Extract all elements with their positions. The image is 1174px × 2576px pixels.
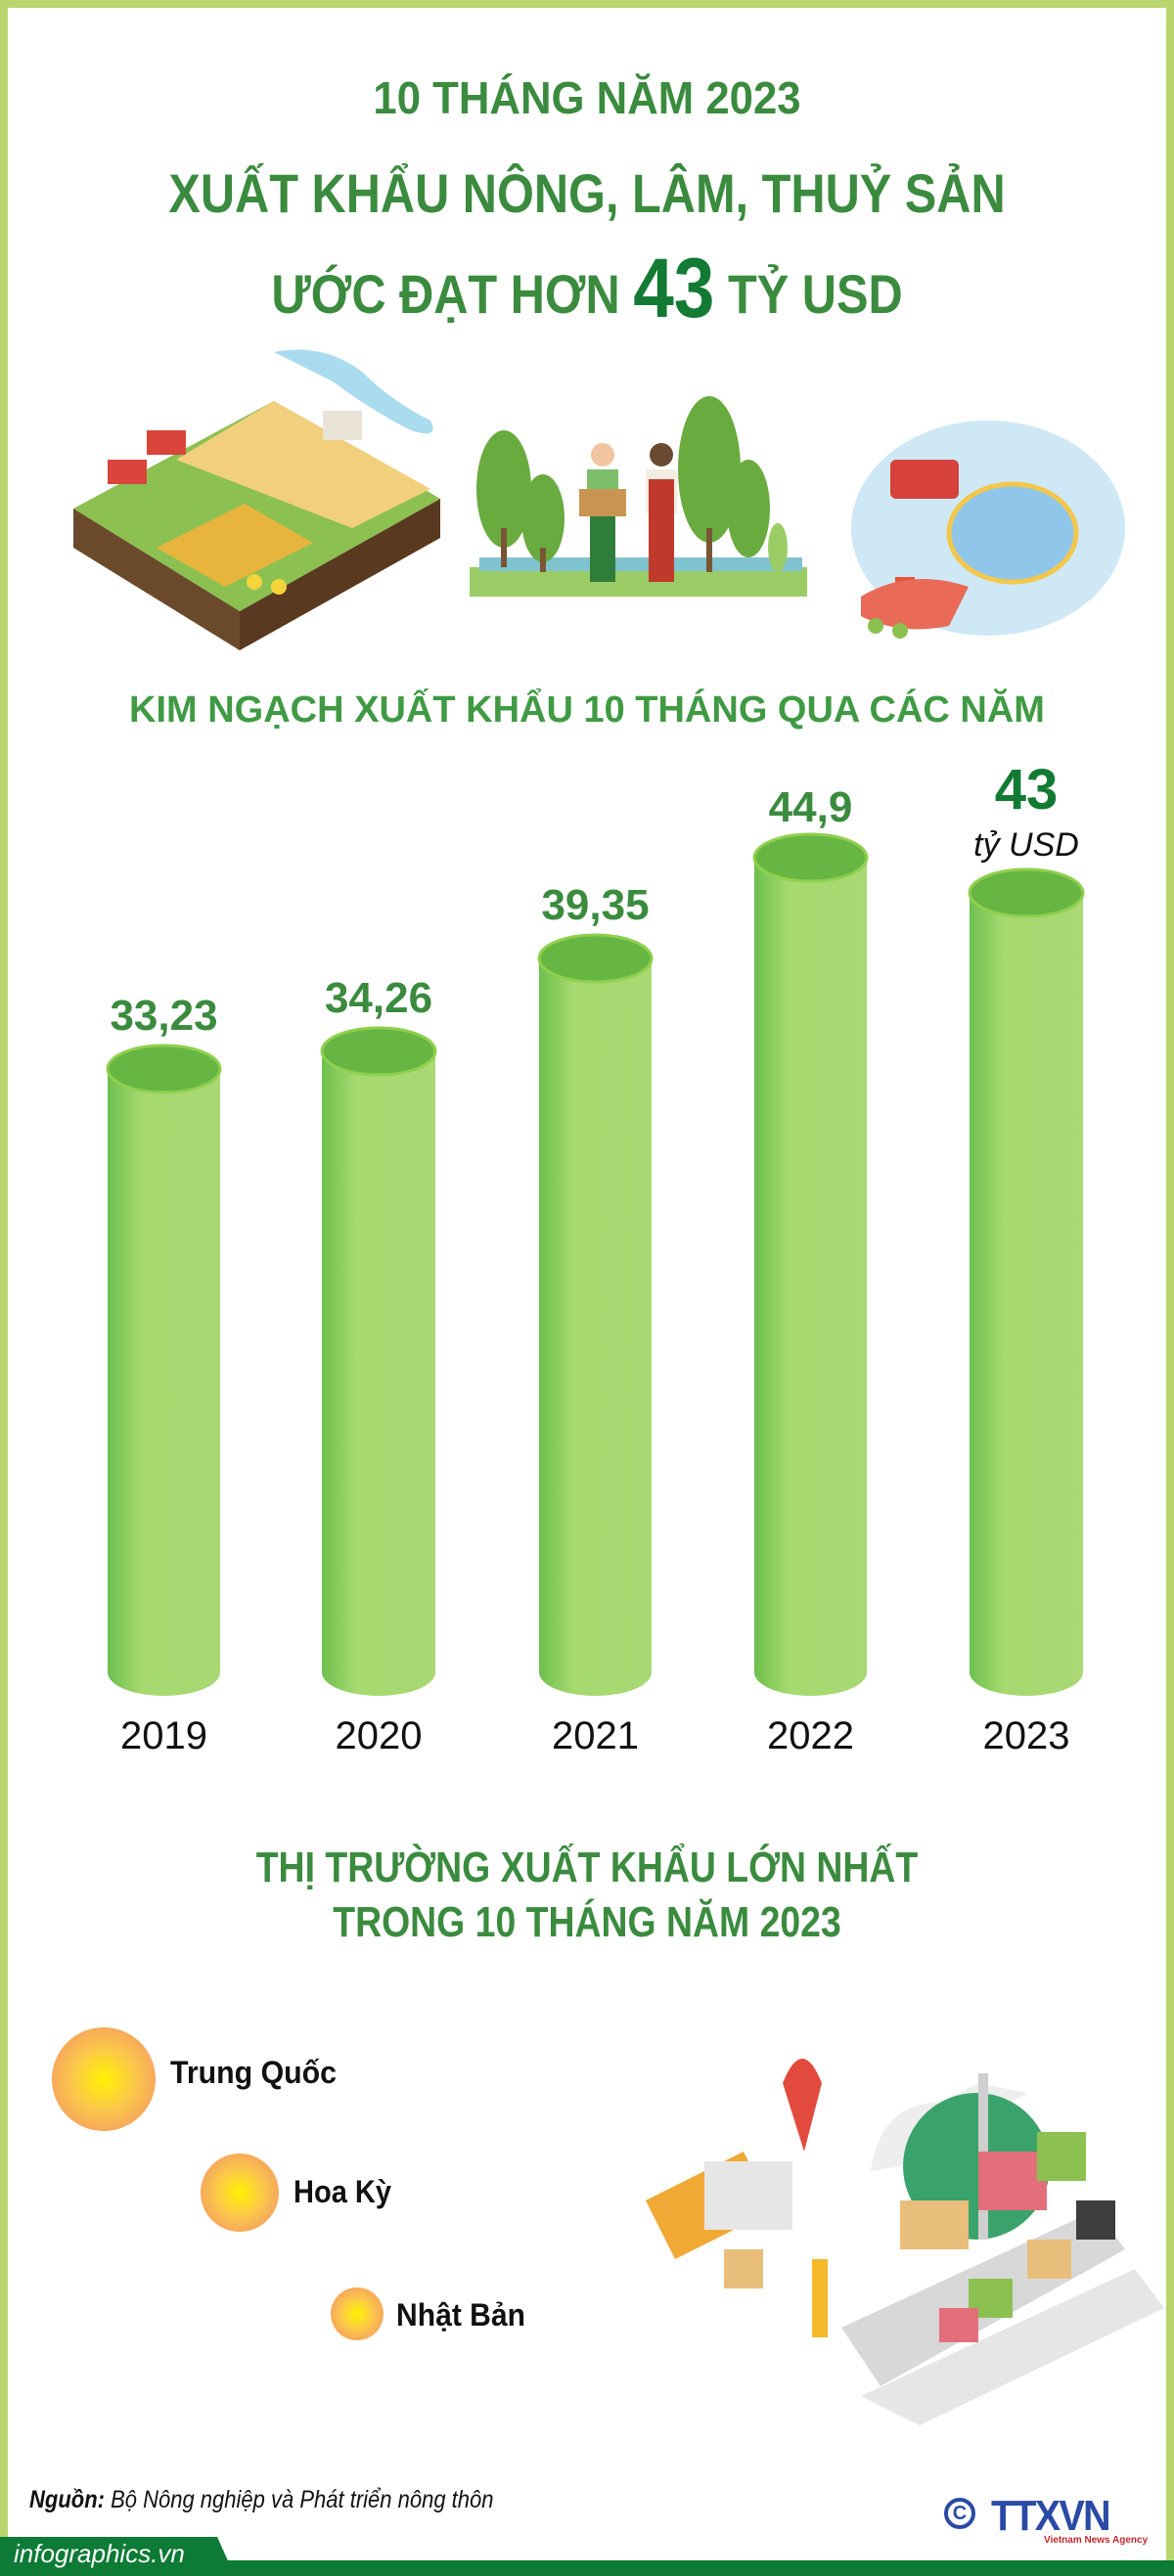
market: Trung Quốc [52,2027,337,2131]
title line 1: 10 THÁNG NĂM 2023 [373,72,801,123]
market: Nhật Bản: Nhật Bản [396,2297,525,2332]
illustrations row [73,350,1125,650]
title line 2: XUẤT KHẨU NÔNG, LÂM, THUỶ SẢN [168,162,1006,224]
market: Trung Quốc: Trung Quốc [170,2055,337,2090]
source note: Nguồn: Bộ Nông nghiệp và Phát triển nông thôn [29,2486,493,2513]
bar 2020 [322,974,435,1757]
logo: TTXVN [944,2492,1149,2546]
bar 2023: 2023 [983,1714,1069,1757]
bar chart [106,763,1084,1757]
bar 2022: 2022 [767,1714,854,1757]
footer text: infographics.vn [14,2539,185,2568]
section heading: markets: THỊ TRƯỜNG XUẤT KHẨU LỚN NHẤT [256,1843,918,1891]
bar 2022: 44,9 [769,783,852,831]
title line 3: ƯỚC ĐẠT HƠN 43 TỶ USD [271,242,903,335]
markets list [52,2027,525,2340]
footer bar [0,2537,1174,2576]
section heading: markets: TRONG 10 THÁNG NĂM 2023 [333,1898,841,1946]
icon: farm land block [73,350,440,650]
bar 2023: tỷ USD [973,826,1079,864]
bar 2019: 2019 [120,1714,207,1757]
bar 2020: 2020 [336,1714,422,1757]
bar 2023 [970,758,1083,1757]
market: Nhật Bản [331,2287,525,2340]
section heading: markets [256,1843,918,1946]
market: Hoa Kỳ [201,2154,391,2232]
icon: farmers with trees [470,396,807,597]
chart heading: KIM NGẠCH XUẤT KHẨU 10 THÁNG QUA CÁC NĂM [129,689,1045,731]
bar 2022 [754,783,867,1757]
icon: logistics illustration [646,2059,1164,2425]
market: Hoa Kỳ: Hoa Kỳ [294,2174,391,2209]
logo: TTXVN: Vietnam News Agency [1044,2535,1148,2546]
bar 2020: 34,26 [325,974,432,1022]
bar 2019: 33,23 [110,992,218,1040]
bar 2019 [108,992,220,1757]
bar 2021: 2021 [552,1714,639,1757]
bar 2021: 39,35 [541,881,650,929]
logo: TTXVN: TTXVN [991,2492,1109,2540]
bar 2021 [539,881,652,1757]
icon: fish farm [851,421,1125,639]
logo: TTXVN: C [953,2503,967,2524]
title [168,72,1006,335]
